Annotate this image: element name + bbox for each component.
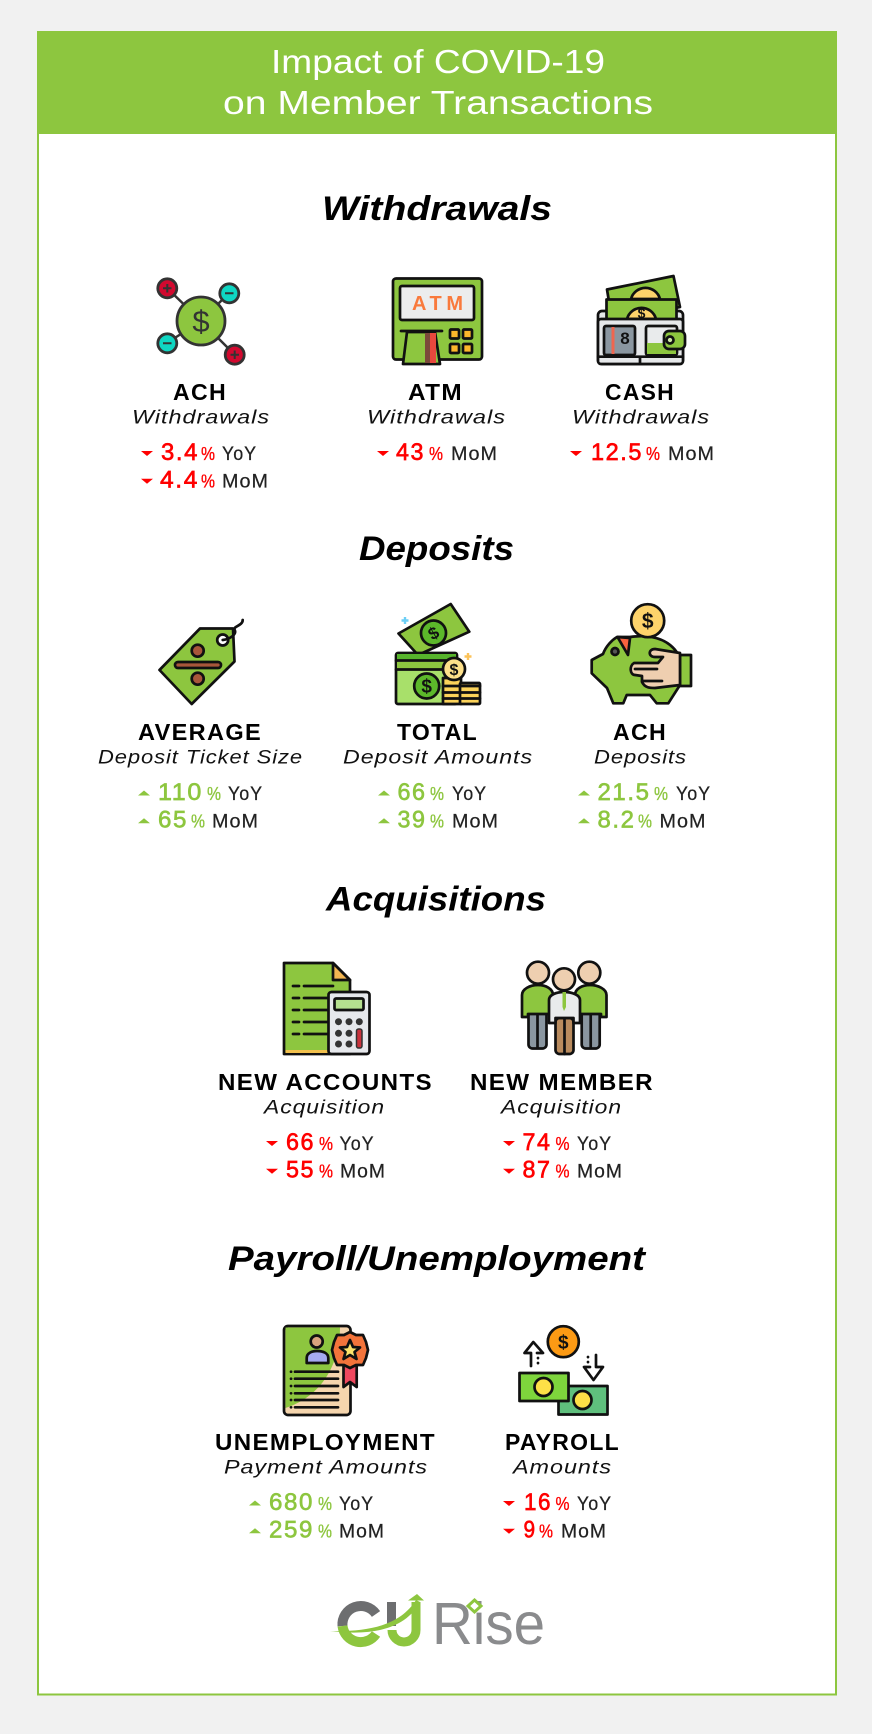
stat: 87% MoM (503, 1157, 623, 1184)
stat: 66% YoY (266, 1129, 374, 1156)
stat: 16% YoY: % (556, 1494, 570, 1514)
stat: 12.5% MoM: % (646, 444, 660, 464)
panel: new accounts (218, 963, 433, 1184)
header banner (37, 31, 837, 134)
stat: 680% YoY: % (318, 1494, 332, 1514)
stat: 66% YoY: YoY (340, 1134, 374, 1155)
sublabel: Amounts (512, 1456, 612, 1478)
icon: three people (522, 962, 606, 1054)
icon: money stack (396, 604, 480, 704)
stat: 21.5% YoY: YoY (676, 784, 711, 805)
stat: 16% YoY: YoY (577, 1494, 612, 1515)
stat: 65% MoM: 65 (158, 807, 188, 834)
stat: 680% YoY: 680 (269, 1489, 314, 1516)
sublabel: Deposits (594, 746, 687, 768)
stat: 87% MoM: 87 (522, 1157, 552, 1184)
sublabel: Payment Amounts (224, 1456, 428, 1478)
heading: Deposits: Deposits (359, 530, 514, 568)
panel: average deposit ticket size (98, 620, 303, 834)
title: Impact of COVID-19 (271, 43, 605, 80)
panel: payroll amounts (503, 1326, 620, 1544)
heading: Withdrawals: Withdrawals (322, 190, 552, 228)
panel: ACH withdrawals (132, 279, 270, 494)
stat: 3.4% YoY: % (201, 444, 215, 464)
stat: 43% MoM: % (429, 444, 443, 464)
logo: CU Rise: Rise (432, 1591, 545, 1657)
title (223, 43, 653, 121)
stat: 9% MoM: MoM (561, 1522, 607, 1543)
stat: 4.4% MoM: MoM (222, 472, 269, 493)
icon: money stack: $ (421, 676, 432, 698)
stat: 12.5% MoM: MoM (668, 444, 715, 465)
stat: 259% MoM: 259 (269, 1517, 314, 1544)
label: UNEMPLOYMENT (215, 1429, 436, 1455)
label: ATM (408, 379, 463, 405)
stat: 21.5% YoY: % (654, 784, 668, 804)
stat: 16% YoY (503, 1489, 612, 1516)
stat: 65% MoM: MoM (212, 812, 259, 833)
icon: piggy bank: $ (642, 610, 654, 633)
stat: 66% YoY: 66 (398, 779, 426, 806)
stat: 65% MoM (138, 807, 259, 834)
icon: wallet with cash: $ (638, 305, 646, 321)
stat: 9% MoM: % (539, 1522, 553, 1542)
stat: 680% YoY: YoY (339, 1494, 374, 1515)
heading: Acquisitions: Acquisitions (325, 880, 546, 918)
stat: 110% YoY: % (207, 784, 221, 804)
label: AVERAGE (138, 719, 262, 745)
sublabel: Withdrawals (572, 406, 710, 428)
stat: 21.5% YoY: 21.5 (598, 779, 650, 806)
stat: 3.4% YoY: 3.4 (161, 439, 199, 466)
label: NEW ACCOUNTS (218, 1069, 433, 1095)
stat: 3.4% YoY: YoY (222, 444, 257, 465)
icon: piggy bank (592, 604, 691, 703)
icon: document and calculator (284, 963, 370, 1054)
stat: 74% YoY: % (556, 1134, 570, 1154)
stat: 39% MoM: % (430, 812, 444, 832)
stat: 259% MoM (249, 1517, 385, 1544)
stat: 87% MoM: MoM (577, 1162, 623, 1183)
sublabel: Withdrawals (132, 406, 270, 428)
sublabel: Withdrawals (367, 406, 506, 428)
stat: 55% MoM: % (319, 1162, 333, 1182)
stat: 259% MoM: MoM (339, 1522, 385, 1543)
panel: total deposit amounts (343, 604, 533, 834)
stat: 259% MoM: % (318, 1522, 332, 1542)
icon: wallet with cash (598, 276, 685, 364)
label: PAYROLL (505, 1429, 620, 1455)
icon: money stack: $ (450, 662, 459, 679)
panel: cash withdrawals (570, 276, 715, 466)
stat: 8.2% MoM: % (638, 812, 652, 832)
stat: 12.5% MoM (570, 439, 715, 466)
panel: new member (470, 962, 654, 1184)
stat: 55% MoM (266, 1157, 386, 1184)
icon: ATM: ATM (412, 293, 463, 315)
stat: 680% YoY (249, 1489, 374, 1516)
stat: 55% MoM: 55 (286, 1157, 315, 1184)
stat: 66% YoY: % (430, 784, 444, 804)
logo: CU Rise (330, 1591, 545, 1657)
icon: ACH network (158, 279, 244, 364)
stat: 66% YoY: % (319, 1134, 333, 1154)
stat: 74% YoY: 74 (522, 1129, 552, 1156)
stat: 43% MoM (377, 439, 498, 466)
stat: 39% MoM (378, 807, 499, 834)
stat: 87% MoM: % (556, 1162, 570, 1182)
stat: 65% MoM: % (191, 812, 205, 832)
sublabel: Acquisition (500, 1096, 622, 1118)
heading: Payroll/Unemployment: Payroll/Unemployment (228, 1240, 647, 1278)
stat: 4.4% MoM: 4.4 (160, 467, 199, 494)
icon: wallet with cash: 8 (620, 329, 630, 348)
stat: 8.2% MoM (578, 807, 706, 834)
label: TOTAL (397, 719, 478, 745)
icon: payroll bills and arrows (520, 1326, 608, 1414)
panel: ACH deposits (578, 604, 711, 834)
label: ACH (613, 719, 667, 745)
label: CASH (605, 379, 675, 405)
label: ACH (173, 379, 227, 405)
stat: 43% MoM: 43 (396, 439, 425, 466)
icon: price tag (160, 620, 243, 704)
sublabel: Deposit Amounts (343, 746, 533, 768)
stat: 43% MoM: MoM (451, 444, 498, 465)
stat: 3.4% YoY (141, 439, 257, 466)
stat: 110% YoY: YoY (228, 784, 263, 805)
stat: 110% YoY (138, 779, 263, 806)
icon: ATM (393, 278, 482, 364)
sublabel: Deposit Ticket Size (98, 746, 303, 768)
stat: 9% MoM (503, 1517, 607, 1544)
panel: unemployment payment amounts (215, 1326, 436, 1544)
stat: 110% YoY: 110 (158, 779, 203, 806)
stat: 66% YoY: YoY (452, 784, 487, 805)
stat: 74% YoY: YoY (577, 1134, 612, 1155)
label: NEW MEMBER (470, 1069, 654, 1095)
stat: 66% YoY (378, 779, 487, 806)
stat: 8.2% MoM: 8.2 (598, 807, 636, 834)
panel: ATM withdrawals (367, 278, 506, 466)
icon: money stack: $ (425, 623, 443, 644)
stat: 9% MoM: 9 (524, 1517, 536, 1544)
icon: certificate document (284, 1326, 368, 1415)
stat: 74% YoY (503, 1129, 612, 1156)
stat: 16% YoY: 16 (524, 1489, 552, 1516)
stat: 55% MoM: MoM (340, 1162, 386, 1183)
stat: 8.2% MoM: MoM (660, 812, 706, 833)
stat: 21.5% YoY (578, 779, 711, 806)
stat: 39% MoM: MoM (452, 812, 499, 833)
stat: 66% YoY: 66 (286, 1129, 315, 1156)
stat: 12.5% MoM: 12.5 (591, 439, 643, 466)
title: on Member Transactions (223, 84, 653, 121)
stat: 4.4% MoM: % (201, 472, 215, 492)
icon: ACH network: $ (192, 304, 210, 339)
stat: 4.4% MoM (141, 467, 269, 494)
icon: payroll bills and arrows: $ (558, 1332, 569, 1354)
sublabel: Acquisition (263, 1096, 385, 1118)
stat: 39% MoM: 39 (398, 807, 426, 834)
